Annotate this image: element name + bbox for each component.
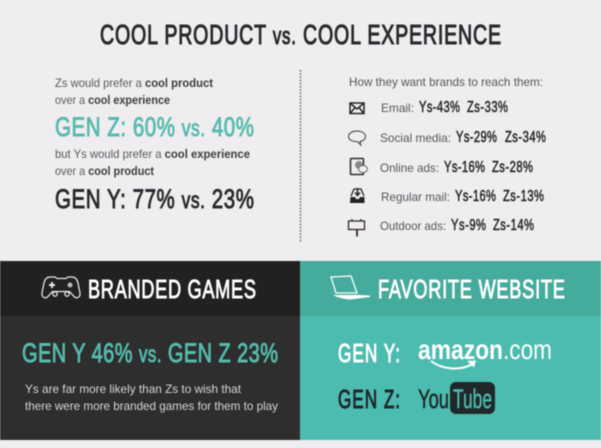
- row: email: [350, 98, 508, 115]
- row: regular mail: [350, 187, 544, 204]
- icon: billboard: [348, 219, 364, 236]
- header band: favorite website: [300, 261, 601, 316]
- row: social media: [348, 128, 546, 145]
- title: COOL PRODUCT vs. COOL EXPERIENCE: [100, 20, 501, 51]
- row: regular mail: Zs-13%: [503, 187, 544, 204]
- row: regular mail: Regular mail:: [381, 190, 450, 204]
- panel: favorite website: [300, 261, 601, 440]
- Gen Z statistic: GEN Z: 60% vs. 40%: [55, 112, 254, 143]
- Gen Z favorite: YouTube: [338, 382, 495, 414]
- row: regular mail: Ys-16%: [455, 187, 496, 204]
- Gen Y favorite: Amazon: GEN Y:: [338, 338, 400, 368]
- text block: Gen Z preference: Zs would prefer a cool product: [55, 76, 213, 90]
- row: outdoor ads: Ys-9%: [451, 216, 486, 233]
- header band: branded games: [0, 261, 300, 316]
- panel: branded games: [0, 261, 300, 440]
- icon: mail tray: [350, 188, 364, 203]
- panel: how brands should reach them: [348, 75, 546, 236]
- logo: YouTube: Tube: [453, 384, 492, 414]
- logo: amazon: [418, 334, 552, 369]
- logo: YouTube: [418, 382, 495, 414]
- panel: cool product vs cool experience statistics: over a cool product: [55, 164, 154, 178]
- row: social media: Social media:: [380, 131, 451, 145]
- row: online ads: Online ads:: [380, 161, 439, 175]
- text block: branded games description: there were more branded games for them to play: [25, 399, 278, 413]
- text block: Gen Y preference: but Ys would prefer a cool experience: [55, 147, 250, 161]
- row: email: Zs-33%: [467, 98, 508, 115]
- row: email: Ys-43%: [419, 98, 460, 115]
- icon: tablet with ad: [350, 158, 368, 174]
- row: social media: Zs-34%: [505, 128, 546, 145]
- row: outdoor ads: Outdoor ads:: [380, 219, 446, 233]
- row: outdoor ads: [348, 216, 534, 236]
- heading: favorite website: FAVORITE WEBSITE: [378, 275, 565, 304]
- row: online ads: Ys-16%: [444, 158, 485, 175]
- row: social media: Ys-29%: [456, 128, 497, 145]
- logo: amazon: .com: [503, 334, 552, 365]
- text block: branded games description: Ys are far more likely than Zs to wish that: [25, 382, 242, 396]
- row: online ads: Zs-28%: [492, 158, 533, 175]
- row: online ads: [350, 158, 533, 175]
- icon: speech bubble: [348, 131, 366, 145]
- Gen Z favorite: YouTube: GEN Z:: [338, 384, 400, 414]
- logo: amazon: amazon: [418, 334, 503, 365]
- panel: cool product vs cool experience statistics: over a cool experience: [55, 93, 170, 107]
- Gen Y favorite: Amazon: [338, 334, 552, 369]
- Gen Y statistic: GEN Y: 77% vs. 23%: [55, 184, 254, 215]
- icon: game controller: [42, 277, 80, 298]
- icon: envelope: [350, 103, 364, 114]
- row: email: Email:: [381, 101, 414, 115]
- row: outdoor ads: Zs-14%: [493, 216, 534, 233]
- logo: YouTube: You: [418, 384, 449, 414]
- panel: cool product vs cool experience statistics: [55, 76, 254, 215]
- text block: branded games description: [25, 382, 278, 413]
- heading: branded games: BRANDED GAMES: [88, 275, 256, 304]
- statistic: Gen Y vs Gen Z: GEN Y 46% vs. GEN Z 23%: [22, 338, 278, 369]
- heading: how they want brands to reach them: How they want brands to reach them:: [349, 75, 543, 89]
- icon: laptop: [331, 276, 370, 300]
